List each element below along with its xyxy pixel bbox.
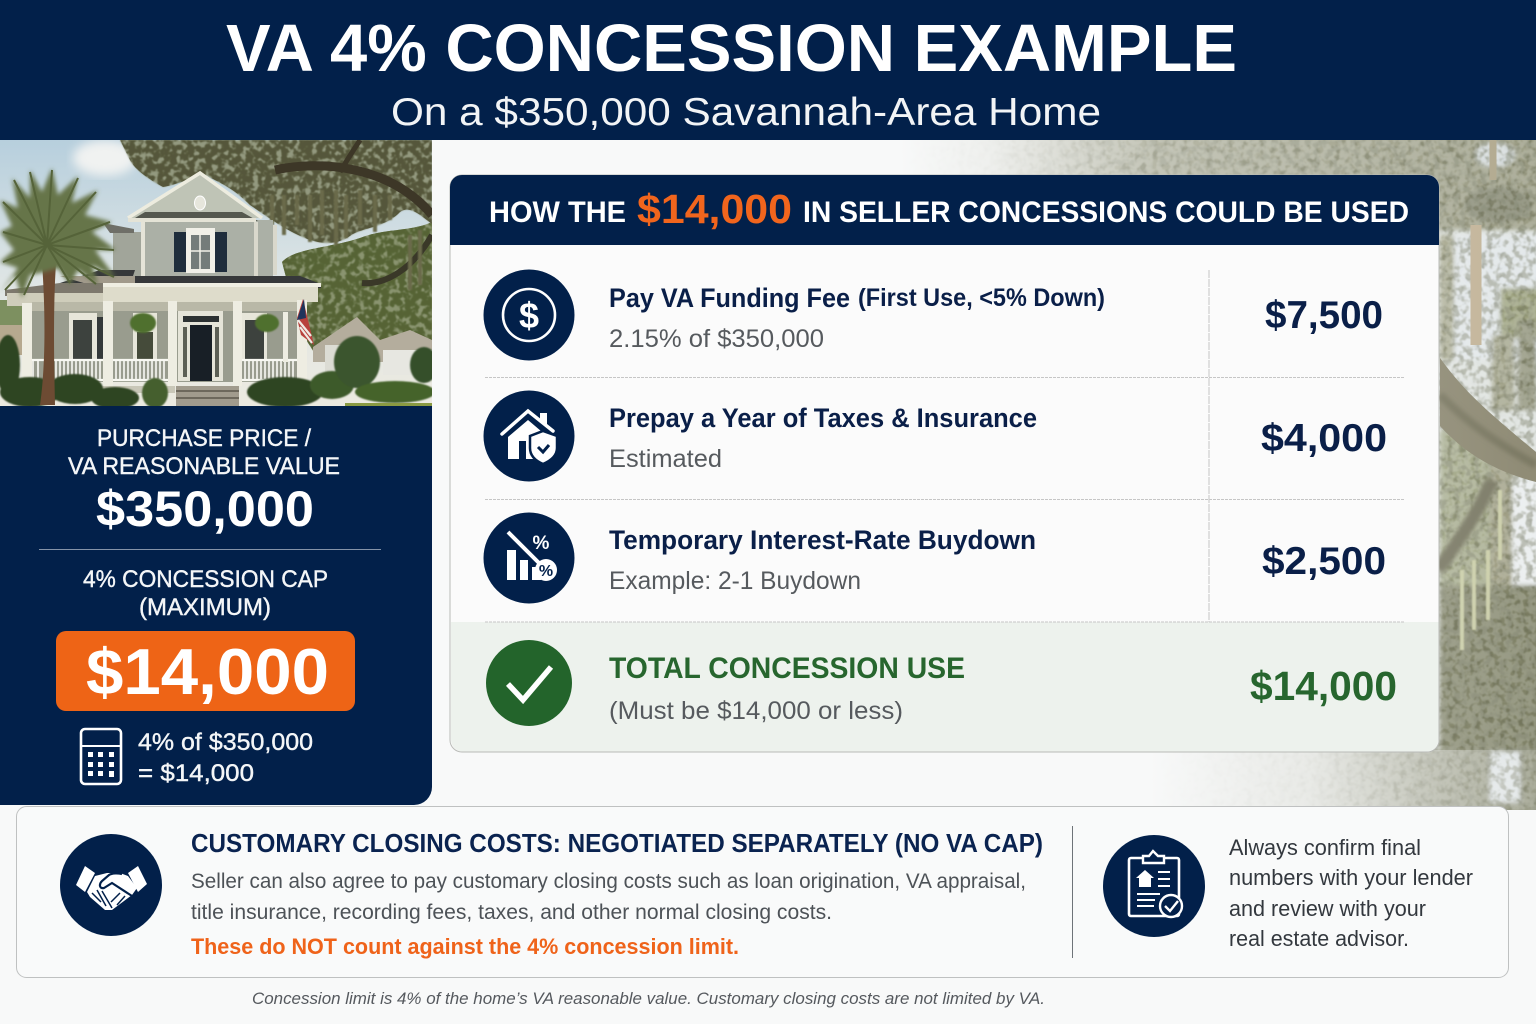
- advisor note: Always confirm final: [1229, 835, 1421, 860]
- row: VA funding fee: Pay VA Funding Fee: [609, 283, 850, 313]
- porch wall: [32, 311, 297, 382]
- row: taxes and insurance: [484, 390, 1387, 482]
- calculation text: 4% of $350,000: [138, 729, 313, 756]
- concession cap label: (MAXIMUM): [139, 594, 271, 621]
- columns: [22, 300, 307, 386]
- title banner: [0, 0, 1536, 140]
- railings: [33, 360, 293, 380]
- shrubs: [0, 335, 438, 409]
- concession cap label: 4% CONCESSION CAP: [83, 566, 328, 593]
- calculation text: = $14,000: [138, 760, 254, 787]
- row: total concession use: TOTAL CONCESSION USE: [609, 652, 965, 685]
- panel heading: [450, 175, 1439, 245]
- icon: handshake: [60, 834, 162, 936]
- icon: falling rate chart: [484, 512, 574, 604]
- row: VA funding fee: 2.15% of $350,000: [609, 325, 824, 353]
- row: total concession use: (Must be $14,000 or less): [609, 697, 903, 725]
- closing costs heading: CUSTOMARY CLOSING COSTS: NEGOTIATED SEPARATELY (NO VA CAP): [191, 828, 1043, 858]
- flag: [297, 299, 314, 345]
- purchase price label: VA REASONABLE VALUE: [68, 453, 340, 480]
- concession cap label: [83, 566, 328, 621]
- row: rate buydown: [484, 512, 1386, 604]
- row: rate buydown: $2,500: [1262, 540, 1386, 583]
- distant trees: [0, 300, 22, 325]
- purchase price label: PURCHASE PRICE /: [97, 425, 311, 452]
- row: taxes and insurance: Estimated: [609, 445, 722, 473]
- purchase price label: [68, 425, 340, 480]
- panel heading: IN SELLER CONCESSIONS COULD BE USED: [803, 196, 1409, 229]
- row: total concession use: $14,000: [1250, 663, 1397, 709]
- icon: falling rate chart: %: [533, 533, 550, 554]
- icon: dollar coin: $: [519, 295, 539, 336]
- advisor note: and review with your: [1229, 896, 1426, 921]
- porch roof: [60, 270, 321, 288]
- calculation text: [138, 729, 313, 787]
- neighboring houses: [313, 317, 432, 362]
- oak canopy: [120, 140, 432, 243]
- panel: customary closing costs: [16, 806, 1508, 978]
- hanging ferns: [130, 313, 156, 333]
- panel: purchase price and concession cap: [0, 406, 432, 805]
- panel heading: HOW THE: [489, 196, 626, 229]
- panel heading: $14,000: [637, 186, 792, 232]
- row: taxes and insurance: Prepay a Year of Taxes & Insurance: [609, 403, 1037, 433]
- row: VA funding fee: (First Use, <5% Down): [858, 284, 1105, 312]
- row: VA funding fee: [484, 270, 1383, 360]
- icon: falling rate chart: %: [539, 563, 553, 580]
- icon: dollar coin: [484, 270, 574, 360]
- closing costs body: [191, 870, 1026, 924]
- footnote: Concession limit is 4% of the home’s VA reasonable value. Customary closing costs are not limited by VA.: [252, 989, 1045, 1008]
- closing costs body: title insurance, recording fees, taxes, and other normal closing costs.: [191, 901, 832, 924]
- icon: clipboard with check: [1103, 835, 1205, 937]
- icon: check mark: [486, 640, 572, 726]
- callout: not counted: These do NOT count against the 4% concession limit.: [191, 934, 739, 959]
- icon: calculator: [81, 729, 121, 784]
- row: taxes and insurance: $4,000: [1261, 417, 1387, 460]
- purchase price value: $350,000: [96, 481, 314, 537]
- steps: [100, 386, 175, 393]
- subtitle: On a $350,000 Savannah-Area Home: [391, 91, 1101, 134]
- title: VA 4% CONCESSION EXAMPLE: [226, 11, 1237, 86]
- photo: Savannah-area house: [0, 140, 438, 409]
- advisor note: [1229, 835, 1473, 951]
- advisor note: numbers with your lender: [1229, 865, 1473, 890]
- door: [178, 311, 223, 381]
- panel: how the concessions could be used: [450, 175, 1439, 752]
- advisor note: real estate advisor.: [1229, 926, 1409, 951]
- row: rate buydown: Example: 2-1 Buydown: [609, 567, 861, 595]
- closing costs body: Seller can also agree to pay customary closing costs such as loan origination, VA appraisal,: [191, 870, 1026, 893]
- row: VA funding fee: $7,500: [1265, 294, 1383, 337]
- row: total concession use: [486, 640, 1397, 726]
- background: faded oak tree scene: [900, 135, 1536, 820]
- palm tree: [40, 262, 56, 405]
- icon: house with shield: [484, 390, 574, 482]
- concession cap value badge: $14,000: [86, 635, 329, 708]
- upper story: [113, 232, 141, 276]
- row: rate buydown: Temporary Interest-Rate Buydown: [609, 525, 1036, 555]
